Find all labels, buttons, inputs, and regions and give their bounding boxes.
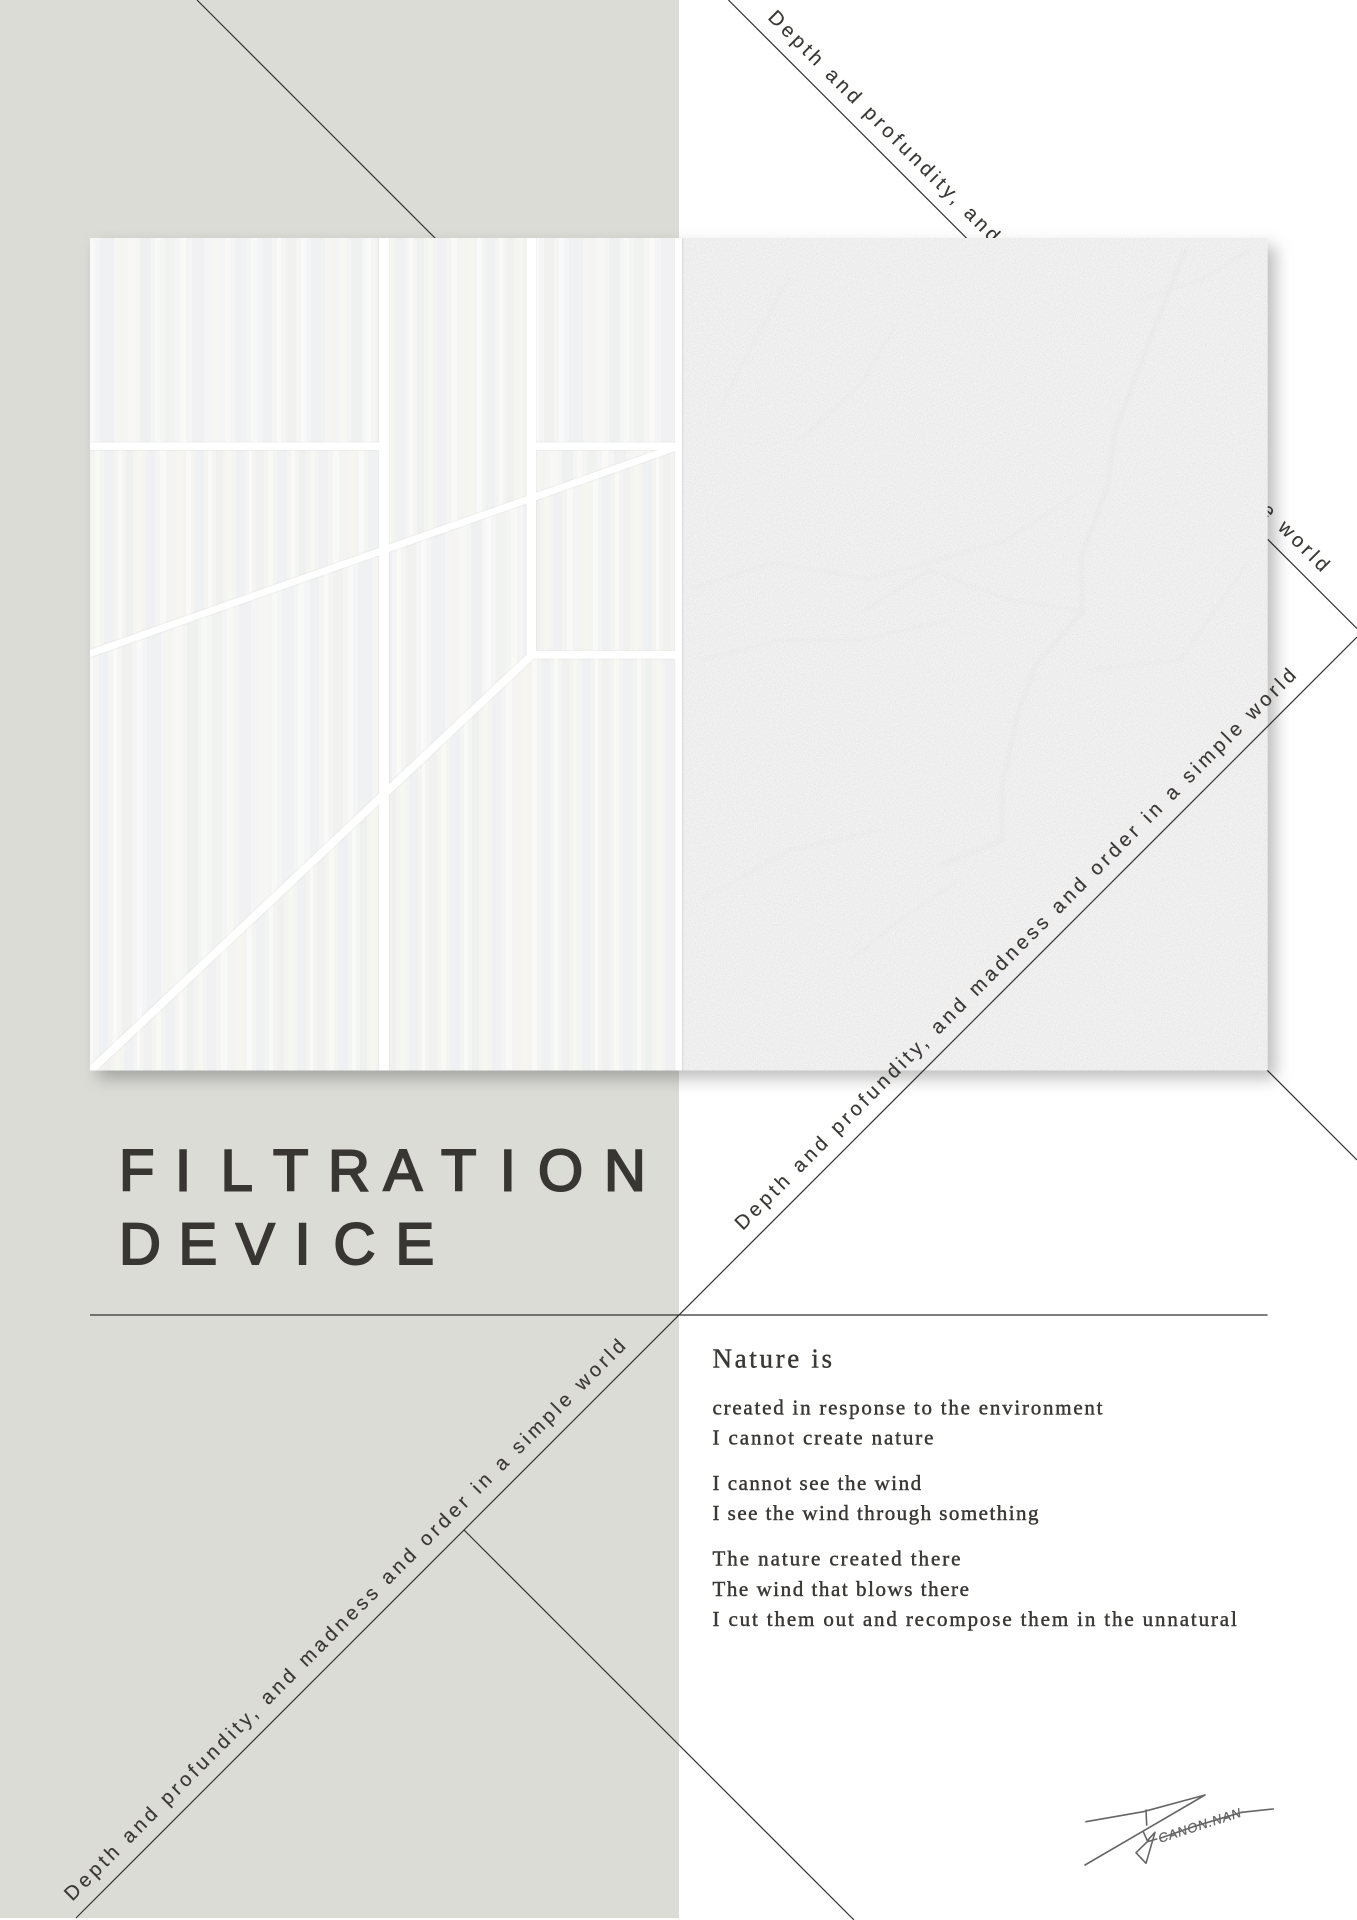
panel: plain textured paper (682, 238, 1268, 1070)
signature: CANON.NAN (1156, 1805, 1243, 1846)
stanza 3 (712, 1546, 1237, 1631)
diagonal text: top right, hidden under card: Depth and profundity, and madness and order in a simple world (763, 6, 1333, 576)
stanza 3: The nature created there (712, 1546, 960, 1570)
card base with shadow (90, 238, 1268, 1070)
striped regions (90, 238, 680, 1072)
poem text block (712, 1344, 1237, 1631)
artwork card (80, 230, 1268, 1080)
title: FILTRATION (119, 1139, 646, 1204)
diagonal text: over card on right: Depth and profundity, and madness and order in a simple world (731, 665, 1301, 1235)
stanza 1: created in response to the environment (712, 1395, 1103, 1419)
diagonal line: top left to right edge, passing under card (197, 0, 1357, 1160)
diagonal text: lower left: Depth and profundity, and madness and order in a simple world (60, 1335, 630, 1905)
stanza 3: I cut them out and recompose them in the unnatural (712, 1607, 1237, 1631)
stanza 1: I cannot create nature (712, 1425, 934, 1449)
stanza 3: The wind that blows there (712, 1577, 969, 1601)
stanza 2: I cannot see the wind (712, 1471, 922, 1495)
panel: striped paper with cut lines (80, 230, 680, 1080)
stanza 2 (712, 1471, 1039, 1525)
stanza 1 (712, 1395, 1103, 1449)
white cut lines (80, 230, 680, 1080)
poem heading: Nature is (712, 1344, 832, 1374)
background panel: grey left half (0, 0, 679, 1918)
signature (1085, 1795, 1273, 1865)
diagonal line: lower left falling (464, 1530, 854, 1920)
title (119, 1139, 646, 1277)
diagonal line: top right, passing under card (728, 0, 1357, 629)
title: DEVICE (119, 1212, 434, 1277)
stanza 2: I see the wind through something (712, 1501, 1039, 1525)
horizontal rule (90, 1314, 1268, 1316)
diagonal line: long rising line over card (76, 637, 1357, 1918)
paper veins (690, 249, 1250, 960)
